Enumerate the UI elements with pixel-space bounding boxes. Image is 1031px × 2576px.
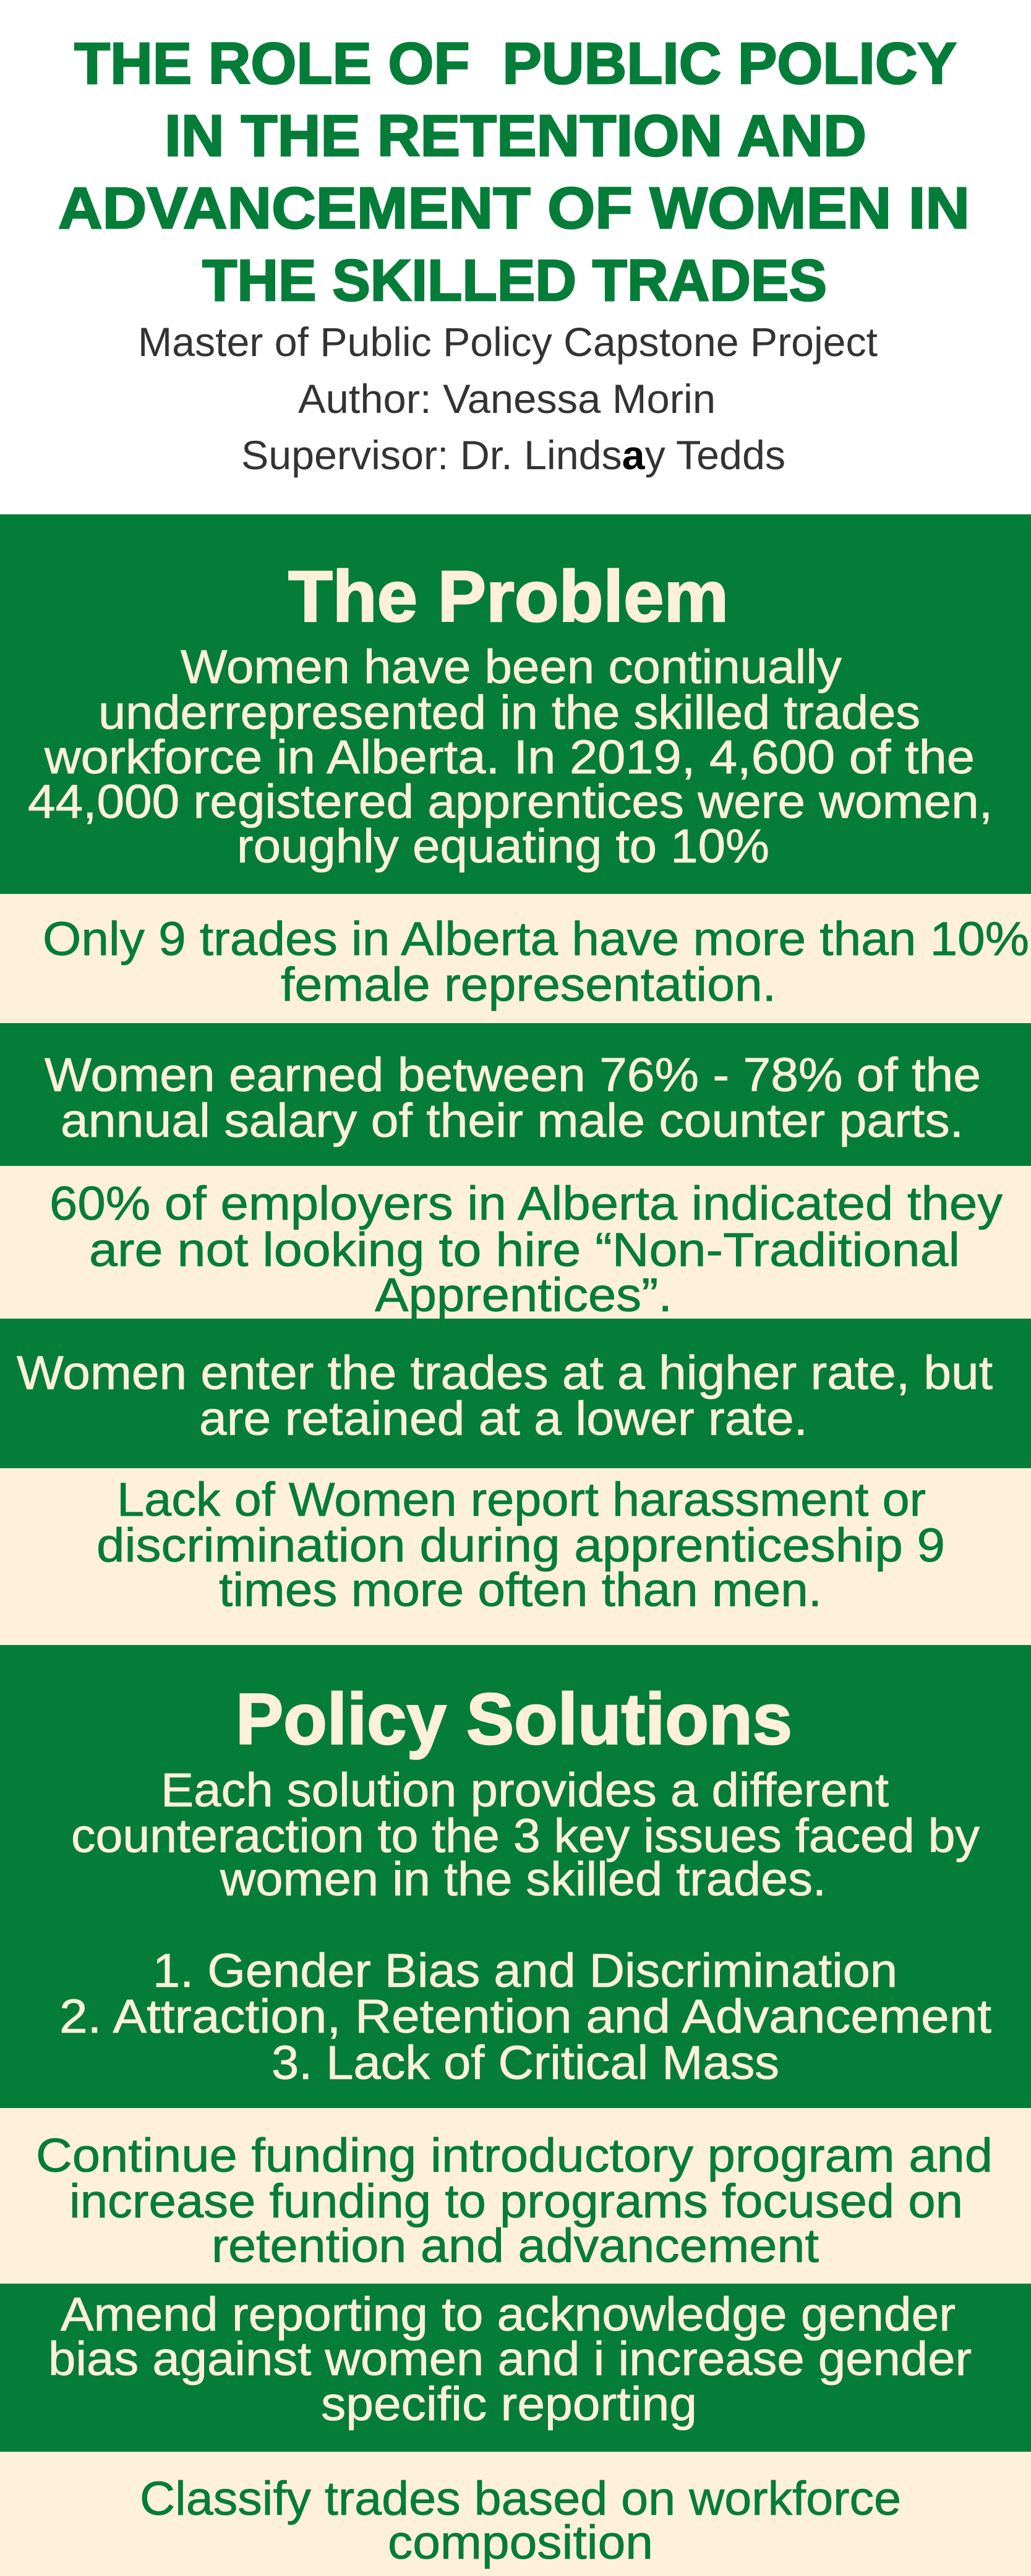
panel: classification solution: Classify trades based on workforce (140, 2472, 901, 2525)
text block: underrepresentation: Women have been continually (181, 640, 842, 694)
panel: employer hiring: 60% of employers in Alberta indicated they (49, 1177, 1003, 1230)
credits: project, author, supervisor (138, 319, 878, 478)
panel: employer hiring (0, 1166, 1031, 1322)
credits: project, author, supervisor: Master of Public Policy Capstone Project (138, 319, 878, 365)
panel: reporting solution: Amend reporting to acknowledge gender (61, 2288, 956, 2341)
list: three key issues: 2. Attraction, Retention and Advancement (59, 1990, 991, 2043)
panel: employer hiring: Apprentices”. (375, 1269, 672, 1322)
panel: funding solution (0, 2108, 1031, 2284)
panel: funding solution: Continue funding introductory program and (36, 2129, 993, 2182)
panel: classification solution (0, 2452, 1031, 2576)
panel: reporting solution: specific reporting (321, 2378, 697, 2431)
text block: solutions overview: Each solution provides a different (161, 1764, 889, 1817)
panel: policy solutions intro (0, 1645, 1031, 2108)
title (58, 31, 970, 313)
title: ADVANCEMENT OF WOMEN IN (58, 176, 970, 241)
text block: underrepresentation: underrepresented in the skilled trades (98, 686, 920, 739)
text block: underrepresentation (28, 640, 993, 873)
list: three key issues (59, 1944, 991, 2089)
header: title and credits (58, 31, 970, 478)
list: three key issues: 1. Gender Bias and Discrimination (153, 1944, 897, 1997)
title: THE SKILLED TRADES (202, 248, 827, 313)
panel: female representation (0, 894, 1031, 1023)
panel: employer hiring: are not looking to hire “Non-Traditional (89, 1223, 960, 1277)
panel: retention rate: Women enter the trades at a higher rate, but (17, 1346, 993, 1400)
panel: salary gap (0, 1023, 1031, 1166)
panel: female representation: Only 9 trades in Alberta have more than 10% (43, 912, 1029, 966)
text block: underrepresentation: workforce in Alberta. In 2019, 4,600 of the (44, 731, 975, 784)
panel: salary gap: annual salary of their male counter parts. (61, 1094, 964, 1147)
panel: classification solution: composition (388, 2516, 653, 2569)
panel: salary gap: Women earned between 76% - 78% of the (45, 1048, 981, 1102)
panel: the problem intro (0, 514, 1031, 894)
heading: Policy Solutions: Policy Solutions (236, 1678, 792, 1759)
panel: harassment: discrimination during apprenticeship 9 (96, 1519, 945, 1572)
panel: female representation: female representation. (281, 958, 776, 1011)
text block: underrepresentation: 44,000 registered apprentices were women, (28, 775, 993, 828)
panel: harassment: Lack of Women report harassment or (117, 1473, 926, 1526)
panel: funding solution: retention and advancement (212, 2219, 819, 2272)
text block: solutions overview: counteraction to the 3 key issues faced by (71, 1809, 980, 1863)
panel: harassment: times more often than men. (219, 1563, 822, 1617)
text block: solutions overview: women in the skilled trades. (220, 1853, 826, 1906)
title: IN THE RETENTION AND (165, 103, 866, 169)
panel: funding solution: increase funding to programs focused on (69, 2175, 963, 2228)
panel: retention rate: are retained at a lower rate. (199, 1392, 808, 1445)
panel: retention rate (0, 1319, 1031, 1468)
title: THE ROLE OF PUBLIC POLICY (74, 31, 957, 96)
panel: reporting solution: bias against women and i increase gender (48, 2332, 972, 2386)
heading: The Problem: The Problem (288, 556, 729, 637)
text block: underrepresentation: roughly equating to 10% (237, 820, 769, 873)
credits: project, author, supervisor: Author: Vanessa Morin (298, 376, 716, 422)
credits: project, author, supervisor: Supervisor: Dr. Lindsay Tedds (241, 432, 785, 478)
panel: reporting solution (0, 2284, 1031, 2452)
list: three key issues: 3. Lack of Critical Mass (272, 2036, 779, 2089)
panel: harassment (0, 1468, 1031, 1645)
text block: solutions overview (71, 1764, 980, 1906)
